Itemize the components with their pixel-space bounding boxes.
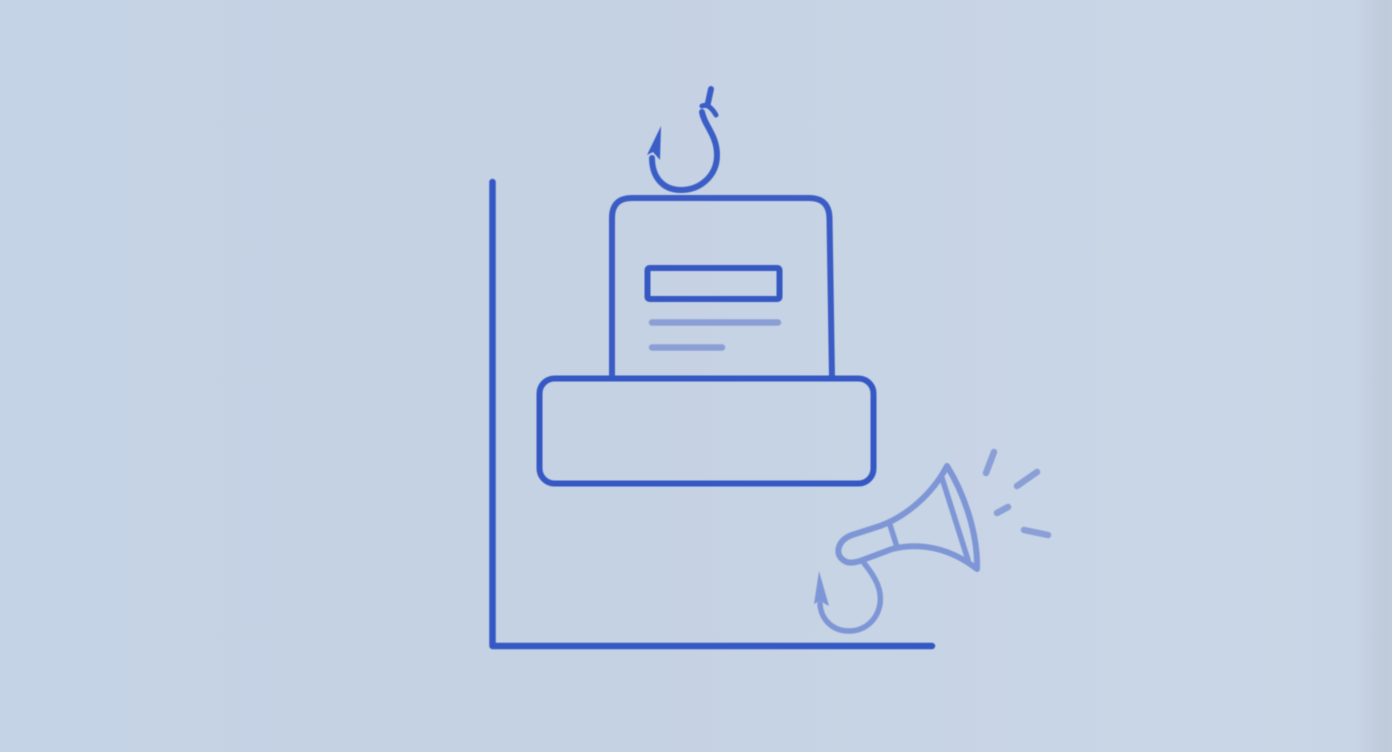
card text line 1	[652, 319, 778, 326]
panel: upper card	[612, 198, 832, 378]
sound rays	[986, 452, 1048, 535]
megaphone hook	[820, 563, 880, 631]
icon: top hook barb	[647, 126, 661, 160]
chart axes	[492, 182, 932, 646]
panel: base block	[540, 378, 874, 484]
megaphone body	[838, 466, 977, 569]
icon: megaphone with hook	[814, 452, 1048, 631]
icon: fish hook on top of card	[647, 89, 717, 190]
card title bar	[648, 268, 780, 299]
card text line 2	[652, 344, 722, 351]
